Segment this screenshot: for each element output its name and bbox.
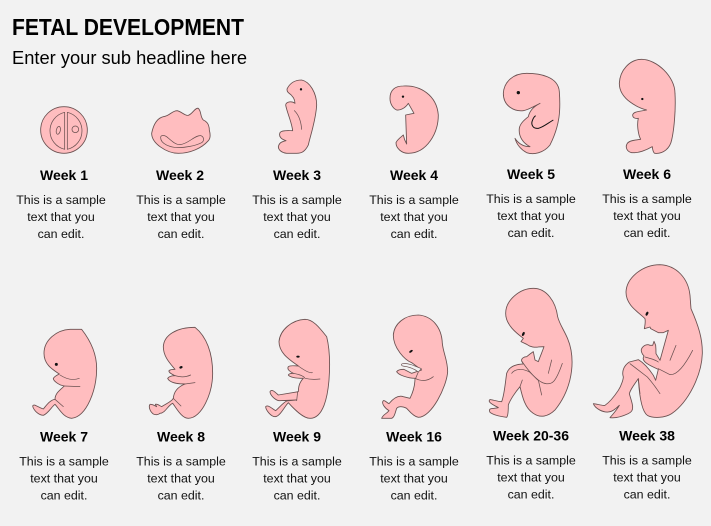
icon: week 1 cell <box>41 107 87 153</box>
text: week 20-36: can edit. <box>508 488 554 502</box>
text: week 3: text that you <box>263 210 331 224</box>
title: FETAL DEVELOPMENT <box>12 14 244 40</box>
icon: week 16 fetus <box>382 315 448 418</box>
icon: week 9 fetus <box>266 319 330 418</box>
label: week 9: Week 9 <box>273 428 321 444</box>
label: week 38: Week 38 <box>619 428 675 444</box>
label: week 3: Week 3 <box>273 167 321 183</box>
icon: week 2 embryo <box>152 108 210 153</box>
panel: week 16 <box>369 315 459 502</box>
icon: week 5 embryo <box>503 73 560 154</box>
text: week 20-36: This is a sample <box>486 454 576 468</box>
text: week 1: This is a sample <box>16 193 106 207</box>
text: week 8: This is a sample <box>136 454 226 468</box>
text: week 5: can edit. <box>508 226 554 240</box>
text: week 38: text that you <box>613 470 681 484</box>
icon: week 38 fetus <box>593 265 702 418</box>
label: week 4: Week 4 <box>390 167 438 183</box>
text: week 7: can edit. <box>41 488 87 502</box>
label: week 20-36: Week 20-36 <box>493 428 569 444</box>
text: week 20-36: text that you <box>497 470 565 484</box>
text: week 6: text that you <box>613 209 681 223</box>
text: week 8: text that you <box>147 472 215 486</box>
label: week 2: Week 2 <box>156 167 204 183</box>
text: week 16: This is a sample <box>369 454 459 468</box>
text: week 3: This is a sample <box>252 193 342 207</box>
panel: week 8 <box>136 327 226 502</box>
panel: week 6 <box>602 59 692 240</box>
text: week 7: text that you <box>30 472 98 486</box>
text: week 2: text that you <box>147 210 215 224</box>
panel: week 3 <box>252 80 342 241</box>
icon: week 6 embryo <box>619 59 675 153</box>
text: week 6: can edit. <box>624 226 670 240</box>
icon: week 3 embryo <box>278 80 317 153</box>
text: week 5: This is a sample <box>486 192 576 206</box>
text: week 9: can edit. <box>274 488 320 502</box>
text: week 4: This is a sample <box>369 193 459 207</box>
panel: week 9 <box>252 319 342 502</box>
panel: week 2 <box>136 108 226 241</box>
text: week 6: This is a sample <box>602 192 692 206</box>
text: week 5: text that you <box>497 209 565 223</box>
icon: week 8 fetus <box>149 327 213 418</box>
panel: week 7 <box>19 329 109 502</box>
icon: week 4 embryo <box>390 86 438 153</box>
icon: week 20-36 fetus <box>489 288 572 417</box>
label: week 16: Week 16 <box>386 428 442 444</box>
text: week 3: can edit. <box>274 227 320 241</box>
text: week 16: text that you <box>380 472 448 486</box>
icon: week 7 fetus <box>33 329 97 418</box>
text: week 16: can edit. <box>391 488 437 502</box>
text: week 2: can edit. <box>158 227 204 241</box>
text: week 9: text that you <box>263 472 331 486</box>
label: week 7: Week 7 <box>40 428 88 444</box>
panel: week 20-36 <box>486 288 576 502</box>
text: week 8: can edit. <box>158 488 204 502</box>
text: week 38: can edit. <box>624 488 670 502</box>
label: week 5: Week 5 <box>507 166 555 182</box>
text: week 1: text that you <box>27 210 95 224</box>
panel: week 5 <box>486 73 576 240</box>
text: week 2: This is a sample <box>136 193 226 207</box>
text: week 4: can edit. <box>391 227 437 241</box>
subtitle: Enter your sub headline here <box>12 48 247 68</box>
text: week 1: can edit. <box>38 227 84 241</box>
label: week 1: Week 1 <box>40 167 88 183</box>
text: week 4: text that you <box>380 210 448 224</box>
label: week 6: Week 6 <box>623 166 671 182</box>
label: week 8: Week 8 <box>157 428 205 444</box>
text: week 9: This is a sample <box>252 454 342 468</box>
panel: week 38 <box>593 265 702 502</box>
text: week 7: This is a sample <box>19 454 109 468</box>
panel: week 4 <box>369 86 459 241</box>
text: week 38: This is a sample <box>602 454 692 468</box>
panel: week 1 <box>16 107 106 241</box>
